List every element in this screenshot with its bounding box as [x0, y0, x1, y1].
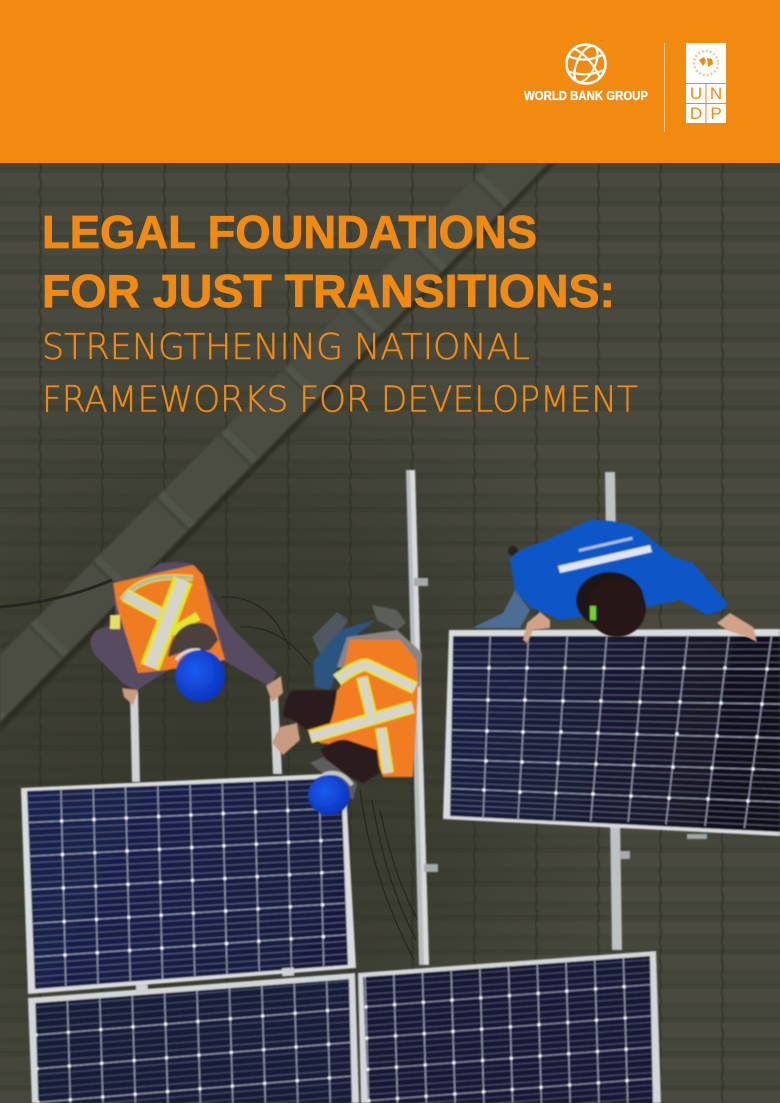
title: [42, 206, 615, 317]
helmet: [308, 775, 350, 815]
vest: [113, 565, 225, 673]
subtitle: STRENGTHENING NATIONAL: [42, 327, 530, 368]
icon: UN emblem: [694, 51, 718, 75]
logo divider: [664, 43, 665, 132]
roof ridge: [0, 163, 556, 732]
worker: centre, orange vest and blue helmet: [272, 605, 422, 815]
solar panel: bottom centre: [358, 951, 661, 1103]
logo: UNDP: P: [710, 104, 722, 123]
mounting rails: [130, 470, 707, 965]
solar panel: right: [443, 629, 780, 836]
vest: [307, 640, 418, 777]
logo: UNDP: N: [710, 84, 722, 103]
hand: [272, 723, 300, 755]
solar panel: left: [21, 773, 356, 994]
helmet: [175, 650, 225, 702]
dark sleeves: [283, 690, 337, 730]
logo: World Bank Group: [524, 43, 648, 103]
solar panel: bottom left: [28, 973, 359, 1103]
jeans: [313, 620, 375, 690]
title: LEGAL FOUNDATIONS: [42, 206, 537, 258]
collar: [168, 623, 218, 657]
hands: [523, 612, 550, 643]
subtitle: FRAMEWORKS FOR DEVELOPMENT: [42, 380, 638, 420]
boots: [312, 612, 348, 660]
logo: UNDP: [686, 43, 726, 123]
logo: UNDP: U: [690, 84, 702, 103]
logo: UNDP: D: [690, 104, 702, 123]
icon: globe: [566, 43, 606, 85]
worker: right, blue jacket and dark beanie: [472, 520, 757, 643]
header band: [0, 0, 780, 163]
subtitle: [42, 327, 638, 420]
arms and jacket: [90, 562, 277, 690]
beanie: [576, 572, 644, 628]
logo: World Bank Group: WORLD BANK GROUP: [524, 88, 648, 103]
worker: left, orange vest and blue helmet: [90, 562, 283, 705]
title: FOR JUST TRANSITIONS:: [42, 265, 615, 317]
